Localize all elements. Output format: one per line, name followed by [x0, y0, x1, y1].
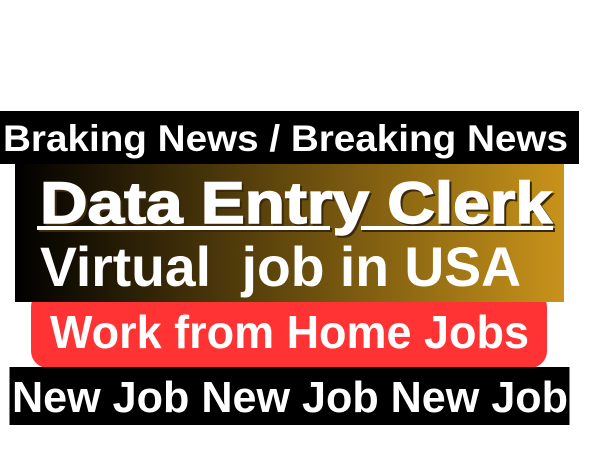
- subtitle: virtual job in usa: Virtual job in USA: [40, 235, 521, 298]
- panel: gradient job title: [15, 164, 564, 302]
- heading: new job repeated: New Job New Job New Job: [12, 373, 568, 422]
- heading: work from home jobs: Work from Home Jobs: [50, 306, 529, 358]
- panel: red work from home banner: [31, 290, 547, 368]
- title: data entry clerk: Data Entry Clerk: [42, 173, 555, 238]
- panel: breaking news bar: [0, 111, 579, 164]
- heading: breaking news: Braking News / Breaking News: [3, 118, 568, 159]
- title: data entry clerk: Data Entry Clerk: [40, 171, 553, 236]
- panel: new job bar: [10, 367, 570, 425]
